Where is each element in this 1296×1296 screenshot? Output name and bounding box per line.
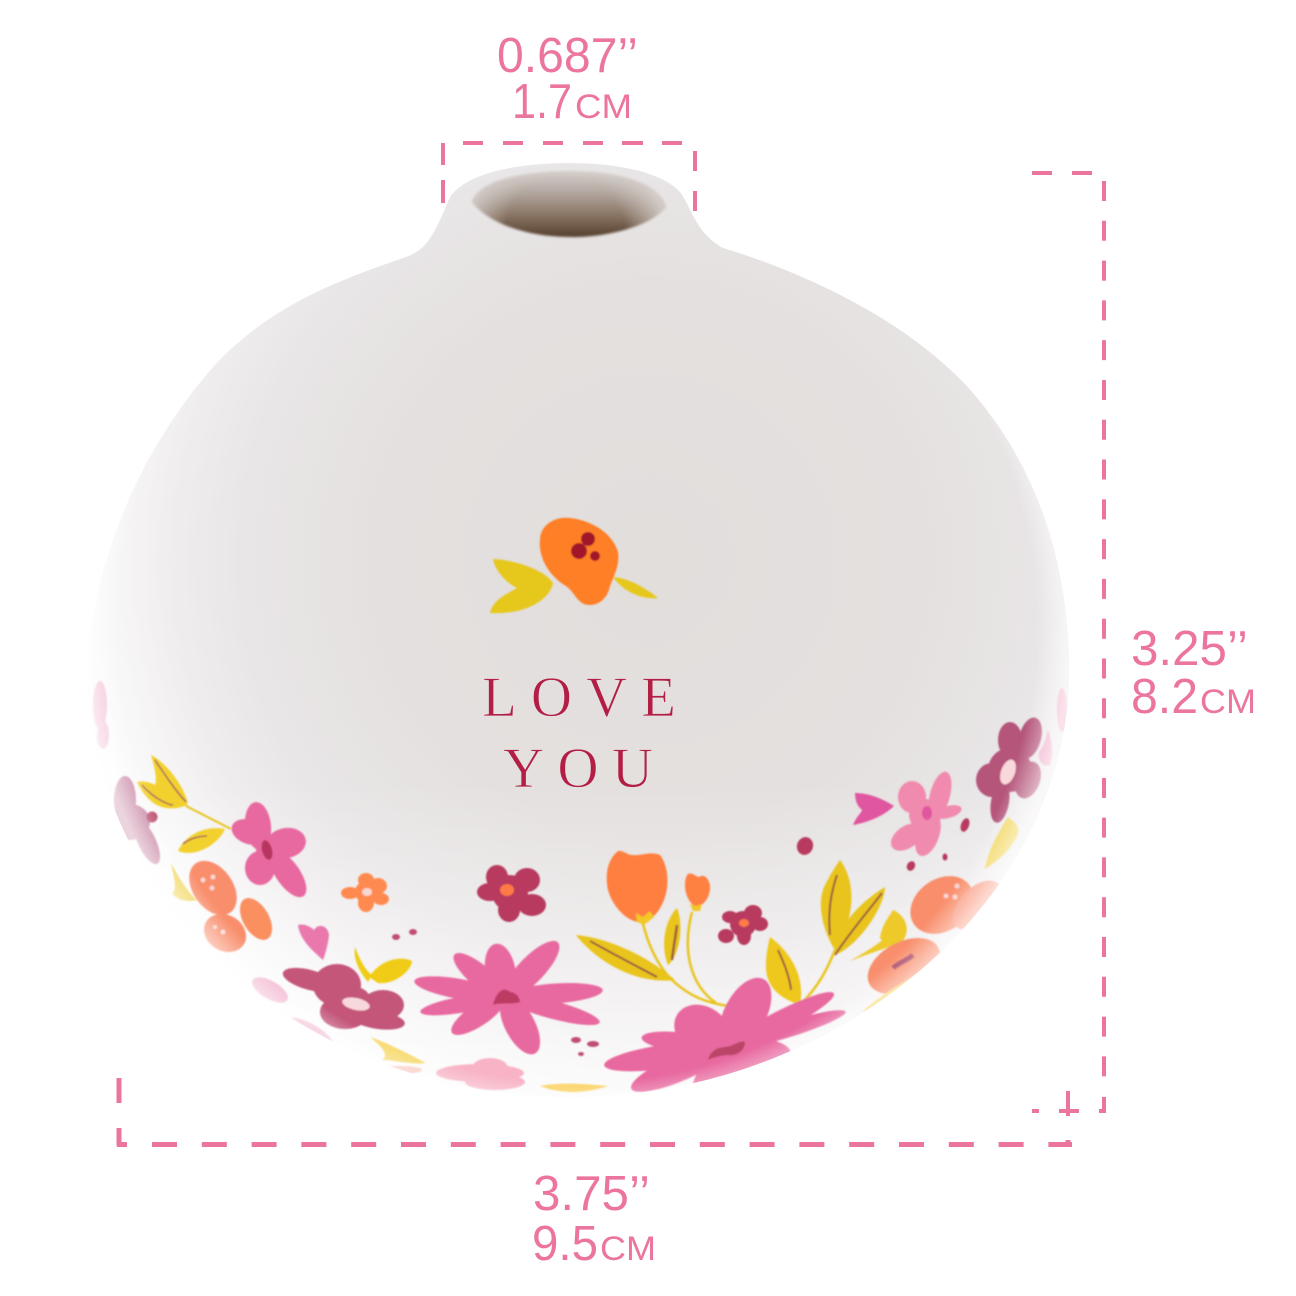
label: 0.687 inches: 0.687’’ (497, 29, 638, 83)
icon: faded mauve flower (114, 775, 161, 865)
vase (80, 150, 1080, 1130)
width dashed bracket (117, 1078, 1072, 1147)
label: 9.5 cm (532, 1217, 656, 1271)
icon: light pink flower (886, 769, 963, 859)
decorative dot (796, 836, 814, 856)
icon: pale yellow leaf right (862, 975, 915, 1012)
icon: maroon wide flower (280, 963, 406, 1033)
icon: pink five-petal flower (230, 801, 308, 898)
label: 8.2 cm: CM (1200, 683, 1256, 721)
icon: pale heart far right (1039, 688, 1067, 766)
dimension: neck opening (443, 29, 695, 211)
text: LOVE: LOVE (482, 666, 676, 729)
vase opening (472, 171, 666, 237)
label: 1.7 cm: CM (575, 88, 632, 126)
vase lower light (534, 952, 780, 1049)
icon: big pink bottom flower (603, 976, 846, 1092)
icon: tulip stems and leaves (576, 908, 738, 1007)
neck dashed bracket (443, 143, 695, 211)
decorative dots (571, 1037, 599, 1056)
icon: yellow leaf with stem (355, 947, 412, 983)
icon: right branch leaves (766, 860, 907, 1005)
icon: orange blossoms right (866, 875, 999, 994)
icon: small orange tulip (685, 873, 710, 911)
icon: faint far-left flower (93, 681, 109, 749)
label: 9.5 cm: CM (600, 1230, 656, 1268)
icon: yellow sliver left (171, 863, 197, 901)
label: 1.7 cm (512, 75, 632, 129)
icon: small orange flower (341, 873, 389, 912)
decorative dots (392, 929, 417, 940)
height dashed bracket (1032, 173, 1104, 1116)
text: YOU: YOU (503, 737, 653, 800)
dimension: width (117, 1078, 1072, 1271)
vase text: LOVE YOU (482, 666, 676, 800)
icon: small dark flower (718, 905, 768, 945)
floral pattern (93, 496, 1069, 1093)
label: 8.2 cm: 8.2 (1131, 670, 1198, 724)
icon: big pink daisy (413, 933, 603, 1061)
label: 9.5 cm: 9.5 (532, 1217, 598, 1271)
decorative dots (905, 817, 971, 872)
icon: faint pink flowers (252, 976, 332, 1041)
icon: pale yellow leaf (370, 1037, 426, 1063)
icon: dark red flower with heart centre (477, 865, 546, 922)
label: 3.25 inches: 3.25’’ (1131, 622, 1248, 676)
dimension: height (1032, 173, 1256, 1116)
icon: pale pink flower (378, 1058, 525, 1090)
icon: pink heart (298, 925, 329, 960)
label: 1.7 cm: 1.7 (512, 75, 572, 129)
vase body (88, 163, 1069, 1097)
icon: yellow sliver right (985, 817, 1018, 869)
icon: pale yellow sliver (540, 1084, 608, 1092)
icon: magenta heart (853, 793, 894, 825)
icon: yellow leaf branch (137, 755, 231, 853)
vase rim highlight (92, 496, 1069, 1092)
icon: orange blossoms (188, 860, 273, 953)
icon: large orange tulip (607, 851, 667, 925)
label: 3.75 inches: 3.75’’ (533, 1167, 650, 1221)
icon: top orange flower (490, 518, 658, 613)
icon: dark pink flower (976, 715, 1046, 824)
label: 8.2 cm (1131, 670, 1256, 724)
